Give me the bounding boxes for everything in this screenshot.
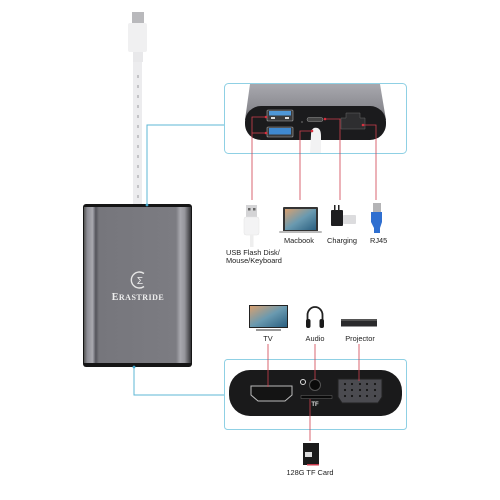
TF label: TF — [311, 402, 319, 408]
icon: RJ45 plug — [371, 203, 382, 233]
brand name: ERASTRIDE — [112, 292, 164, 303]
logo: sigma in crescent: Σ — [137, 276, 143, 287]
red leader lines — [268, 344, 359, 441]
panel: top ports — [224, 84, 406, 200]
USB-C port — [307, 118, 323, 122]
icon: headphones — [306, 307, 324, 328]
connector line: main device to top panel — [147, 125, 224, 205]
icon: projector — [341, 319, 377, 326]
connector line: main device to bottom panel — [134, 367, 224, 395]
TF slot — [301, 396, 332, 398]
label: Audio: Audio — [306, 334, 324, 343]
logo: sigma in crescent — [131, 272, 144, 288]
audio jack — [310, 380, 320, 390]
icon: TV — [249, 305, 288, 330]
attached cable — [310, 128, 321, 153]
VGA port — [338, 379, 382, 403]
label: Macbook: Macbook — [284, 236, 314, 245]
hub port face — [245, 106, 386, 140]
label: RJ45: RJ45 — [370, 236, 387, 245]
hub rear body — [245, 84, 386, 120]
icon: charger — [331, 205, 356, 226]
label: USB Flash Disk / Mouse / Keyboard: USB Flash Disk/ — [226, 248, 280, 257]
main device — [83, 204, 192, 367]
USB-C cable — [128, 12, 147, 205]
icon: Macbook — [279, 207, 322, 233]
HDMI port — [251, 386, 292, 401]
label: Charging: Charging — [327, 236, 357, 245]
label: Projector: Projector — [345, 334, 375, 343]
RJ45 port — [341, 113, 365, 129]
USB-A port upper — [267, 110, 293, 121]
hub port face — [229, 370, 402, 416]
icon: TF card — [303, 443, 319, 466]
red leader lines — [252, 117, 376, 200]
headphone icon — [300, 380, 306, 384]
label: 128G TF Card: 128G TF Card — [286, 468, 334, 477]
icon: USB plug — [244, 205, 259, 247]
label: TV: TV — [263, 334, 273, 343]
USB-A port lower — [267, 127, 293, 137]
panel: bottom ports — [224, 344, 406, 441]
label: USB Flash Disk / Mouse / Keyboard: Mouse/Keyboard — [226, 256, 282, 265]
